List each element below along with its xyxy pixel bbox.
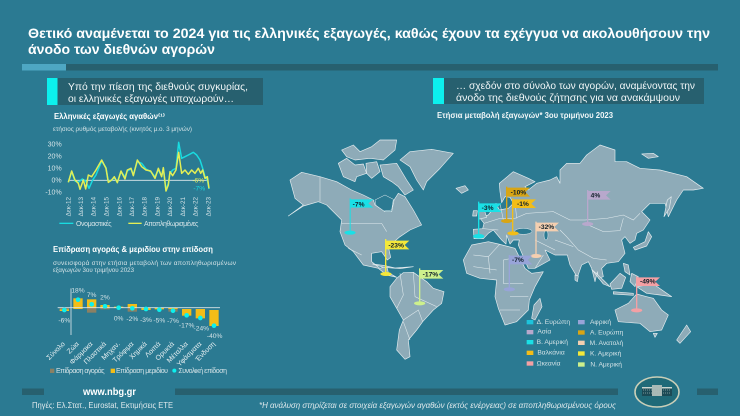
sources: Πηγές: Ελ.Στατ., Eurostat, Εκτιμήσεις ΕΤΕ [32,401,173,410]
bar chart: contribution: -17% [179,323,195,330]
flag: Asia: 4% [591,192,600,199]
title: άνοδο των διεθνών αγορών [28,41,215,57]
callout: right: άνοδο της διεθνούς ζήτησης για να ανακάμψουν [456,92,680,104]
callout: right [433,78,704,104]
line chart: exports: -6% [192,178,204,185]
bar chart: contribution: Ένδυση [194,341,217,364]
bar chart: contribution: Μηχαν. [101,341,122,362]
flag: Central America: -23% [388,242,404,249]
bar chart: contribution: -3% [140,317,152,324]
line chart: exports: Δεκ-22 [193,197,200,216]
bar chart: contribution: Τρόφιμα [111,340,135,364]
title [28,25,710,57]
bar chart: contribution: Πλαστικά [82,340,108,366]
line chart: exports: -7% [193,185,205,192]
chart subtitle: εξαγωγών 3ου τριμήνου 2023 [53,266,134,274]
map legend: Β. Αμερική [537,339,568,346]
line chart: exports: Δεκ-17 [129,197,136,216]
bar chart: contribution: Επίδραση μεριδίου [116,367,168,375]
line chart: exports: Δεκ-20 [167,197,174,216]
flag: Africa [504,255,532,291]
map legend: Ν. Αμερική [590,362,622,369]
line chart: exports: Δεκ-14 [91,197,98,216]
bar chart: contribution [45,287,227,375]
map legend: Ασία [537,328,551,336]
callout: left [47,78,263,105]
bar chart: contribution: 2% [100,294,110,301]
bar chart: contribution: Επίδραση αγοράς [56,367,105,375]
map legend: Δ. Ευρώπη [537,318,570,326]
line chart: exports: 0% [52,177,62,184]
flag: South America: -17% [423,272,438,279]
bar chart: contribution: -7% [167,318,179,325]
bar chart: contribution: Υφάσματα [175,340,203,368]
callout: right: … σχεδόν στο σύνολο των αγορών, αναμένοντας την [456,80,695,92]
bar chart: contribution: -40% [207,333,223,340]
flag: Africa: -7% [512,257,524,264]
line chart: exports: Δεκ-13 [78,197,85,216]
chart subtitle [53,259,236,274]
title: Θετικό αναμένεται το 2024 για τις ελληνικές εξαγωγές, καθώς έχουν τα εχέγγυα να ακολουθήσουν την [28,25,710,41]
line chart: exports: Δεκ-21 [180,197,187,216]
line chart: exports: Δεκ-16 [116,197,123,216]
flag: South America [414,268,443,305]
flag: Balkans: -1% [517,201,529,208]
line chart: exports: 10% [48,165,62,172]
bar chart: contribution: -5% [153,317,165,324]
bar chart: contribution: Λοιπά [143,340,162,359]
map legend [527,318,624,369]
flag: Middle East: -32% [539,224,554,231]
flag: Western Europe: -3% [482,205,494,212]
bar chart: contribution: 0% [114,315,124,322]
line chart: exports: Δεκ-18 [142,197,149,216]
bar chart: contribution: Ζώα [65,340,81,355]
footnote: *Η ανάλυση στηρίζεται σε στοιχεία εξαγωγών αγαθών (εκτός ενέργειας) σε αποπληθωρισμένους όρους [259,401,616,410]
flag: Western Europe [473,202,502,239]
chart heading: greek exports: Ελληνικές εξαγωγές αγαθών⁽¹⁾ [54,112,165,121]
line chart: exports: Αποπληθωρισμένες [144,220,199,228]
flag: North America: -7% [353,201,365,208]
map legend: Κ. Αμερική [590,350,622,357]
flag: Middle East [530,222,559,258]
bar chart: contribution: Σύνολο [45,340,67,362]
bar chart: contribution: Συνολική επίδοση [178,367,227,375]
logo [635,377,679,407]
map legend: Α. Ευρώπη [590,329,624,337]
bar chart: contribution: 7% [87,292,97,299]
line chart: exports: Δεκ-23 [205,197,212,216]
bar chart: contribution: -2% [126,316,138,323]
bar chart: contribution: 18% [71,287,85,294]
line chart: exports: Δεκ-12 [65,197,72,216]
callout: left: οι ελληνικές εξαγωγές υποχωρούν… [68,93,234,105]
flag: North America [344,198,373,235]
flag: Eastern Europe: -10% [511,189,526,196]
line chart: exports: Δεκ-19 [154,197,161,216]
line chart: exports: Δεκ-15 [103,197,110,216]
map heading: Ετήσια μεταβολή εξαγωγών* 3ου τριμήνου 2023 [437,111,614,120]
website: www.nbg.gr [82,387,136,398]
flag: Central America [380,239,409,276]
flag: Eastern Europe [501,187,530,223]
bar chart: contribution: Μέταλλα [165,340,190,365]
map legend: Ωκεανία [537,360,561,368]
map legend: Μ. Ανατολή [590,340,623,347]
bar chart: contribution: Φάρμακα [68,340,94,366]
line chart: exports: Ονομαστικές [76,220,112,228]
bar chart: contribution: Χημικά [128,340,149,361]
bar chart: contribution: -6% [58,318,70,325]
callout: left: Υπό την πίεση της διεθνούς συγκυρίας, [68,81,248,93]
map legend: Βαλκάνια [537,349,565,357]
bar chart: contribution: Ορυκτά [154,340,176,362]
line chart: exports: -10% [45,189,62,196]
bar chart: contribution: -24% [194,325,209,332]
flag: Balkans [507,198,536,235]
chart heading: market and share: Επίδραση αγοράς & μεριδίου στην επίδοση [53,245,213,254]
footer bars [22,388,718,395]
line chart: exports [45,141,212,228]
chart subtitle: συνεισφορά στην ετήσια μεταβολή των αποπληθωρισμένων [53,259,236,267]
header bar [22,64,718,70]
chart subtitle: ετήσιος ρυθμός μεταβολής (κινητός μ.ο. 3 μηνών) [53,125,192,133]
line chart: exports: 30% [48,141,62,148]
world map [288,140,703,359]
flag: Oceania [631,277,660,312]
map legend: Αφρική [590,319,611,326]
line chart: exports: 20% [48,153,62,160]
flag: Oceania: -49% [640,279,656,286]
flag: Asia [582,190,611,226]
